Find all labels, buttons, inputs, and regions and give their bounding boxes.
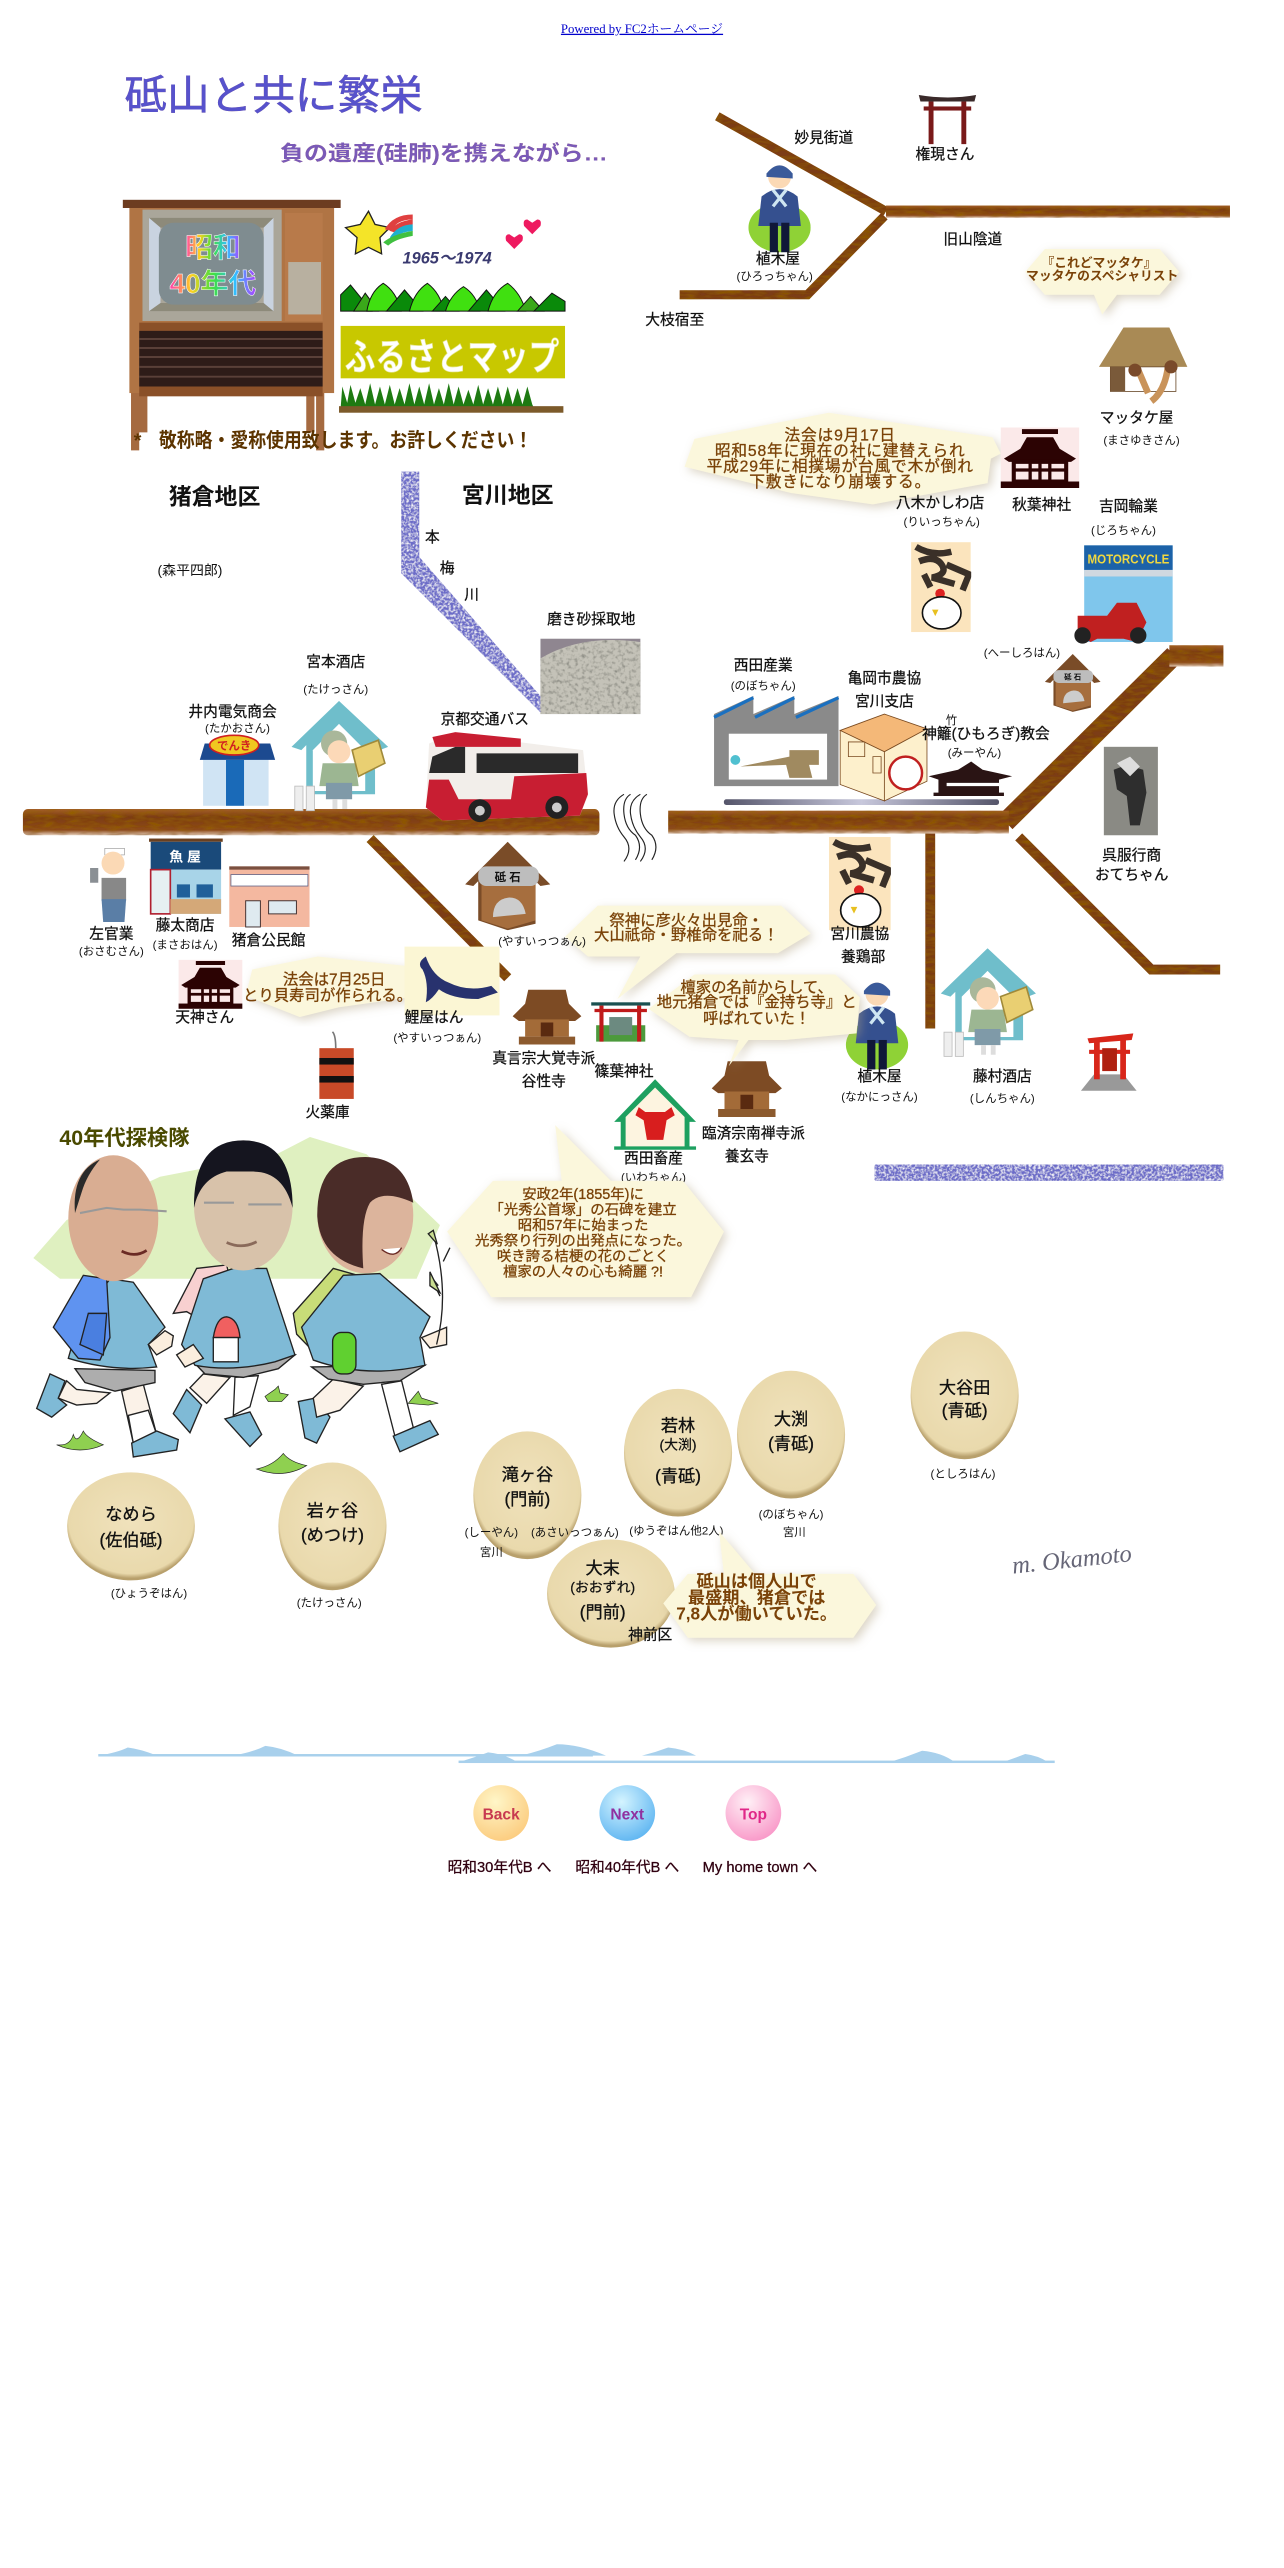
photo: polishing sand (540, 639, 640, 714)
labels: honbai river: 川 (464, 587, 479, 603)
callout: hoe september: 下敷きになり崩壊する。 (749, 472, 931, 491)
icon: thatched house with mushrooms (1099, 328, 1187, 401)
callout: private mountain: 最盛期、猪倉では (688, 1587, 825, 1607)
label: nishida sangyo (731, 657, 796, 692)
heading: miyagawa district: 宮川地区 (462, 482, 554, 508)
heading: ikura district: 猪倉地区 (169, 483, 260, 509)
label: old sanin road: 旧山陰道 (943, 231, 1003, 248)
icon: motorcycle shop: MOTORCYCLE (1087, 551, 1170, 566)
labels: quarry owners: (しーやん) (465, 1526, 518, 1539)
icon: sake shop east (941, 948, 1036, 1056)
label: gardener nakani (841, 1068, 918, 1104)
label: nishida sangyo: 西田産業 (734, 657, 793, 674)
labels: quarry owners: (としろはん) (931, 1467, 996, 1480)
icon: hearts (506, 219, 541, 249)
callout: ansei: 安政2年(1855年)に (522, 1186, 644, 1203)
hiker one (37, 1155, 178, 1457)
note: honorifics: * (134, 430, 142, 452)
label: plasterer: 左官業 (89, 925, 134, 942)
stone: oyada (911, 1331, 1019, 1459)
river: honbai (401, 472, 540, 712)
icon: motorcycle shop (1074, 545, 1173, 644)
label: poultry dept (830, 925, 889, 965)
banner: furusato map: ふるさとマップ (345, 336, 559, 378)
cloud line right (459, 1751, 1055, 1763)
button: next (599, 1785, 655, 1841)
label: koi shop: 鯉屋はん (405, 1009, 463, 1026)
nav labels: 昭和30年代B へ (448, 1859, 551, 1876)
signature: m. Okamoto (1011, 1540, 1133, 1580)
callout: hoe september: 法会は9月17日 (784, 427, 896, 445)
labels: quarry owners (465, 1467, 996, 1559)
stone: ozure (547, 1539, 675, 1648)
callout: matsutake: マッタケのスペシャリスト (1026, 268, 1178, 283)
label: himorogi church: 神籬(ひもろぎ)教会 (922, 726, 1050, 743)
icon: ja building (840, 714, 927, 801)
labels: quarry owners: (ゆうぞはん他2人) (629, 1525, 724, 1538)
nav labels: 昭和40年代B へ (575, 1859, 679, 1876)
callout: hoe july (243, 956, 421, 1017)
labels: yagi akiba yoshioka: (じろちゃん) (1091, 524, 1156, 537)
note: honorifics: 敬称略・愛称使用致します。お許しください！ (159, 429, 532, 452)
icon: road break mark (614, 794, 656, 861)
callout: danka: 呼ばれていた！ (703, 1010, 810, 1028)
label: inouchi electric: 井内電気商会 (188, 704, 277, 721)
plinth bar (724, 799, 999, 805)
label: gardener hirocchan (736, 251, 813, 283)
icon: console television: 40年代 (170, 268, 256, 299)
label: matsutake shop (1100, 410, 1180, 447)
callout: danka: 檀家の名前からして、 (680, 978, 833, 996)
stone: obuchi (737, 1371, 845, 1499)
button: top: Top (740, 1807, 767, 1824)
label: gongen: 権現さん (916, 146, 974, 163)
title: 砥山と共に繁栄 (124, 73, 423, 119)
callout: hoe july: とり貝寿司が作られる。 (243, 987, 412, 1005)
stone: takigatani: 滝ヶ谷 (502, 1465, 553, 1485)
callout: matsutake: 『これどマッタケ』 (1041, 255, 1156, 270)
label: takessan: (たけっさん) (297, 1597, 362, 1610)
callout: ansei: 「光秀公首塚」の石碑を建立 (489, 1201, 677, 1218)
label: matsutake shop: (まさゆきさん) (1103, 434, 1180, 447)
icon: plasterer (90, 848, 126, 922)
stone: takigatani (473, 1431, 581, 1559)
date label: 1965～1974 (403, 250, 492, 268)
labels: quarry owners: (あさいっつぁん) (531, 1526, 619, 1539)
label: kameoka ja: 宮川支店 (855, 693, 914, 710)
grass tufts (57, 1386, 438, 1473)
labels: honbai river: 本 (425, 529, 440, 546)
callout: deities: 大山祇命・野椎命を祀る！ (594, 926, 778, 944)
labels: yagi akiba yoshioka: 吉岡輪業 (1099, 498, 1158, 515)
label: community center: 猪倉公民館 (232, 932, 305, 949)
icon: sake shop west (292, 701, 388, 811)
stone: iwagatani: (めつけ) (301, 1525, 364, 1545)
icon: shinoba shrine torii (591, 1002, 650, 1042)
icon: console television: 昭和 (185, 232, 241, 263)
callout: ansei: 昭和57年に始まった (518, 1217, 648, 1234)
stone: oyada: (青砥) (942, 1401, 988, 1421)
label: poultry dept: 宮川農協 (830, 925, 889, 942)
labels: quarry owners: 宮川 (480, 1546, 503, 1559)
label: miyamoto sake: 宮本酒店 (306, 654, 365, 671)
label: myoken road: 妙見街道 (794, 129, 854, 146)
label: hyozo: (ひょうぞはん) (111, 1587, 187, 1600)
labels: honbai river: 梅 (440, 560, 455, 577)
label: poultry dept: 養鶏部 (841, 948, 885, 965)
labels: yagi akiba yoshioka: 秋葉神社 (1012, 496, 1071, 513)
icon: fish and tobacco shop: 魚 屋 (169, 848, 201, 864)
nav labels (448, 1859, 817, 1876)
callout: matsutake (1025, 249, 1179, 314)
icon: akiba shrine (1001, 427, 1079, 488)
stone: ozure: 神前区 (628, 1626, 673, 1643)
label: matsutake shop: マッタケ屋 (1100, 410, 1173, 427)
subtitle: 負の遺産(硅肺)を携えながら… (280, 141, 608, 165)
label: nishida sangyo: (のぼちゃん) (731, 679, 796, 692)
label: kimono peddler: 呉服行商 (1102, 847, 1161, 864)
button: next: Next (610, 1807, 644, 1824)
banner: furusato map (341, 326, 565, 378)
label: gardener nakani: (なかにっさん) (841, 1091, 918, 1104)
icon: community center (229, 866, 310, 927)
callout: danka (649, 974, 860, 1066)
label: morihei shiro: (森平四郎) (158, 562, 222, 578)
callout: ansei: 咲き誇る桔梗の花のごとく (497, 1248, 669, 1265)
icon: red torii (1081, 1033, 1137, 1091)
label: fujita shoten (153, 917, 218, 951)
callout: ansei: 檀家の人々の心も綺麗 ?! (503, 1264, 663, 1281)
icon: whetstone house east (1045, 654, 1101, 712)
label: nishida chikusan: (いわちゃん) (621, 1171, 686, 1184)
stone: iwagatani: 岩ヶ谷 (307, 1501, 358, 1521)
label: fujimura sake: (しんちゃん) (970, 1092, 1035, 1105)
label: plasterer: (おさむさん) (79, 945, 144, 958)
label: nishida chikusan (621, 1150, 686, 1184)
stone: iwagatani (278, 1463, 387, 1590)
icon: chicken shop sign (911, 542, 971, 632)
callout: ansei: 光秀祭り行列の出発点になった。 (475, 1233, 691, 1250)
illustration: three hikers (33, 1137, 450, 1473)
callout: private mountain: 砥山は個人山で (696, 1571, 817, 1591)
label: oeda: 大枝宿至 (645, 311, 704, 328)
label: kyoto kotsu bus: 京都交通バス (441, 711, 529, 728)
callout: deities (565, 906, 811, 999)
labels: quarry owners: (のぼちゃん) (759, 1508, 824, 1521)
icon: torii gongen (919, 95, 976, 144)
callout: danka: 地元猪倉では『金持ち寺』と (657, 993, 857, 1011)
stone: ozure: 大末 (585, 1558, 620, 1578)
icon: tree row (341, 283, 565, 311)
label: gardener hirocchan: (ひろっちゃん) (736, 270, 813, 283)
icon: bus (426, 732, 588, 822)
icon: gardener nakani (846, 983, 908, 1069)
icon: kokushoji temple (513, 990, 581, 1044)
label: powder store: 火薬庫 (305, 1104, 350, 1121)
label: plasterer (79, 925, 144, 958)
stone: wakabayashi: 若林 (661, 1415, 695, 1435)
label: koi shop: (やすいっつぁん) (393, 1032, 481, 1045)
label: shinoba shrine: 篠葉神社 (595, 1063, 654, 1080)
stone: wakabayashi: (大渕) (659, 1436, 697, 1452)
label: fujimura sake (970, 1068, 1035, 1105)
label: heshiro: (へーしろはん) (984, 647, 1060, 660)
label: himorogi church: (みーやん) (948, 747, 1001, 760)
label: gardener hirocchan: 植木屋 (756, 251, 800, 268)
labels: yagi akiba yoshioka: (りいっちゃん) (904, 516, 980, 529)
label: kokushoji temple (492, 1050, 596, 1090)
icon: electric store (200, 735, 275, 806)
stone: namera (67, 1472, 195, 1580)
label: fujimura sake: 藤村酒店 (973, 1068, 1032, 1085)
label: inouchi electric: (たかおさん) (205, 722, 270, 735)
label: kokushoji temple: 谷性寺 (522, 1073, 566, 1090)
icon: church temple (929, 762, 1012, 796)
stone: namera: (佐伯砥) (100, 1530, 163, 1550)
label: kimono peddler (1095, 847, 1168, 883)
icon: yogenji temple (712, 1061, 782, 1117)
icon: console television (123, 200, 341, 450)
icon: koi (405, 947, 500, 1015)
icon: gardener hirocchan (748, 165, 811, 252)
callout: hoe september: 昭和58年に現在の社に建替えられ (715, 442, 965, 460)
link: Powered by FC2: Powered by FC2ホームページ (561, 22, 723, 36)
label: yasui stone: (やすいっつぁん) (498, 935, 586, 948)
icon: dynamite (319, 1032, 354, 1099)
label: kameoka ja (848, 670, 921, 710)
labels: quarry owners: 宮川 (783, 1526, 806, 1539)
button: back (473, 1785, 529, 1841)
stone: takigatani: (門前) (504, 1489, 550, 1509)
road: west main (23, 809, 599, 978)
icon: rainbow star (346, 211, 413, 254)
button: back: Back (483, 1807, 520, 1824)
label: polishing sand site: 磨き砂採取地 (547, 611, 636, 628)
stone: obuchi: 大渕 (774, 1409, 808, 1429)
stone: namera: なめら (105, 1504, 157, 1524)
river: east segment (875, 1164, 1223, 1181)
icon: factory (714, 696, 839, 786)
icon: grass strip (339, 383, 563, 413)
label: tenjin: 天神さん (175, 1009, 234, 1026)
hiker three (293, 1157, 450, 1452)
callout: private mountain: 7,8人が働いていた。 (676, 1604, 837, 1624)
heading: explorers: 40年代探検隊 (59, 1126, 190, 1150)
label: nishida chikusan: 西田畜産 (624, 1150, 683, 1167)
label: inouchi electric (188, 704, 277, 735)
photo: kimono peddler (1104, 747, 1158, 835)
stone: oyada: 大谷田 (939, 1378, 990, 1398)
label: kimono peddler: おてちゃん (1095, 866, 1168, 883)
callout: hoe september: 平成29年に相撲場が台風で木が倒れ (707, 458, 974, 476)
stone: ozure: (おおずれ) (570, 1579, 635, 1595)
callout: private mountain (663, 1531, 876, 1638)
callout: hoe september (685, 413, 1001, 504)
stone: wakabayashi (624, 1389, 732, 1517)
button: top (726, 1785, 781, 1841)
roads: north junction (680, 116, 1230, 295)
callout: deities: 祭神に彦火々出見命・ (609, 911, 763, 929)
background hills (33, 1137, 440, 1279)
stone: ozure: (門前) (580, 1602, 626, 1622)
label: yogenji: 養玄寺 (725, 1148, 769, 1165)
callout: hoe july: 法会は7月25日 (283, 970, 385, 988)
hiker two (173, 1140, 295, 1447)
icon: whetstone house west (465, 842, 550, 930)
label: himorogi church: 竹 (946, 713, 957, 727)
label: yogenji: 臨済宗南禅寺派 (702, 1125, 805, 1142)
stone: obuchi: (青砥) (768, 1433, 814, 1453)
label: himorogi church (922, 713, 1050, 760)
label: miyamoto sake: (たけっさん) (303, 683, 368, 696)
label: yogenji (702, 1125, 805, 1165)
cloud line left (98, 1744, 696, 1756)
icon: cow house (614, 1079, 696, 1150)
label: koi shop (393, 1009, 481, 1045)
nav labels: My home town へ (703, 1860, 817, 1876)
label: fujita shoten: (まさおはん) (153, 938, 218, 951)
roads: east junction (668, 645, 1223, 1029)
callout: ansei (447, 1125, 724, 1297)
icon: fish and tobacco shop (149, 839, 223, 914)
label: gardener nakani: 植木屋 (857, 1068, 902, 1085)
labels: yagi akiba yoshioka (896, 495, 1158, 537)
icon: electric store: でんき (217, 739, 251, 752)
icon: tenjin shrine (179, 960, 242, 1009)
labels: yagi akiba yoshioka: 八木かしわ店 (896, 495, 985, 512)
label: miyamoto sake (303, 654, 368, 696)
label: kameoka ja: 亀岡市農協 (848, 670, 921, 687)
label: fujita shoten: 藤太商店 (156, 917, 215, 934)
label: kokushoji temple: 真言宗大覚寺派 (492, 1050, 596, 1067)
icon: chicken farm sign (829, 837, 891, 930)
stone: wakabayashi: (青砥) (655, 1466, 701, 1486)
labels: honbai river (425, 529, 479, 603)
